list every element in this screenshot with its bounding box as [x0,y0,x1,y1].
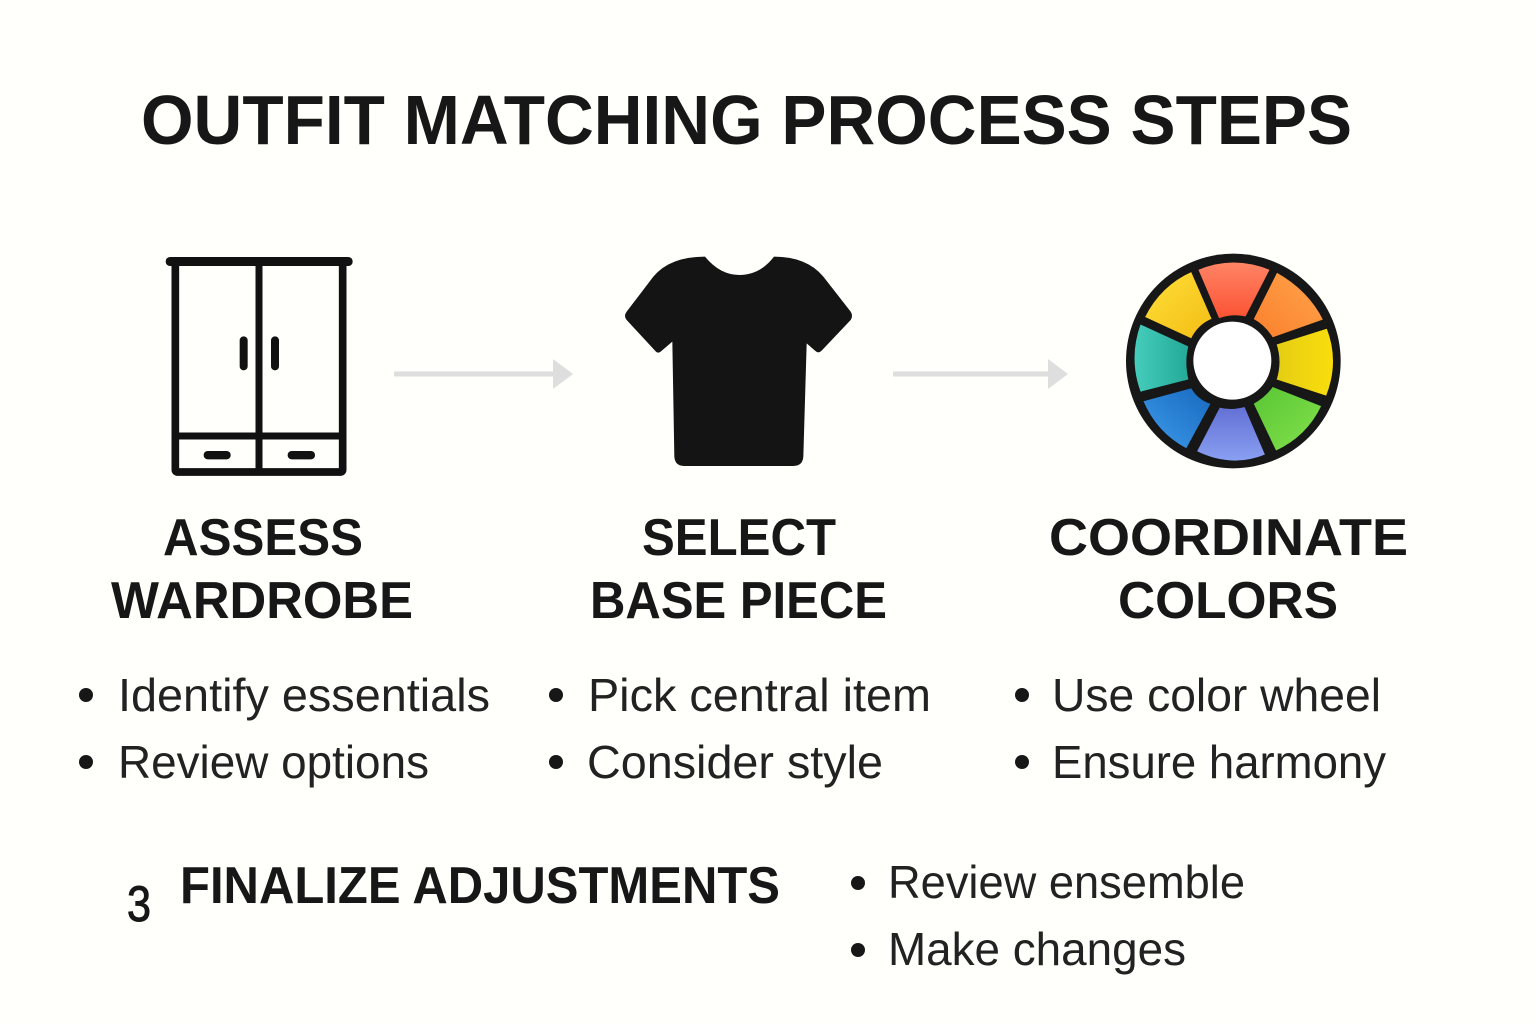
list: assess wardrobe [79,669,490,788]
icon: color wheel [1126,254,1341,468]
list: finalize adjustments: Make changes [888,923,1186,975]
list: assess wardrobe: Identify essentials [118,669,490,721]
heading: assess wardrobe [111,509,413,630]
title: OUTFIT MATCHING PROCESS STEPS [141,81,1352,159]
arrow: wardrobe to shirt [394,359,573,389]
heading: coordinate colors: COORDINATE [1049,509,1408,567]
heading: coordinate colors: COLORS [1118,572,1338,630]
heading: assess wardrobe: WARDROBE [111,572,413,630]
list: coordinate colors: Ensure harmony [1052,736,1386,788]
heading: assess wardrobe: ASSESS [163,509,363,567]
list: select base piece [549,669,931,788]
icon: wardrobe [166,257,353,472]
heading: select base piece: SELECT [642,509,836,567]
list: finalize adjustments: Review ensemble [888,856,1245,908]
list: finalize adjustments [851,856,1245,975]
list: assess wardrobe: Review options [118,736,429,788]
list: coordinate colors [1015,669,1386,788]
list: select base piece: Consider style [587,736,883,788]
heading: select base piece [590,509,887,630]
heading: coordinate colors [1049,509,1408,630]
arrow: shirt to color wheel [893,359,1068,389]
heading: finalize adjustments: FINALIZE ADJUSTMENTS [180,857,780,915]
list: coordinate colors: Use color wheel [1052,669,1381,721]
step number: 3 [127,876,151,932]
heading: select base piece: BASE PIECE [590,572,887,630]
icon: t-shirt [625,257,852,466]
list: select base piece: Pick central item [588,669,931,721]
